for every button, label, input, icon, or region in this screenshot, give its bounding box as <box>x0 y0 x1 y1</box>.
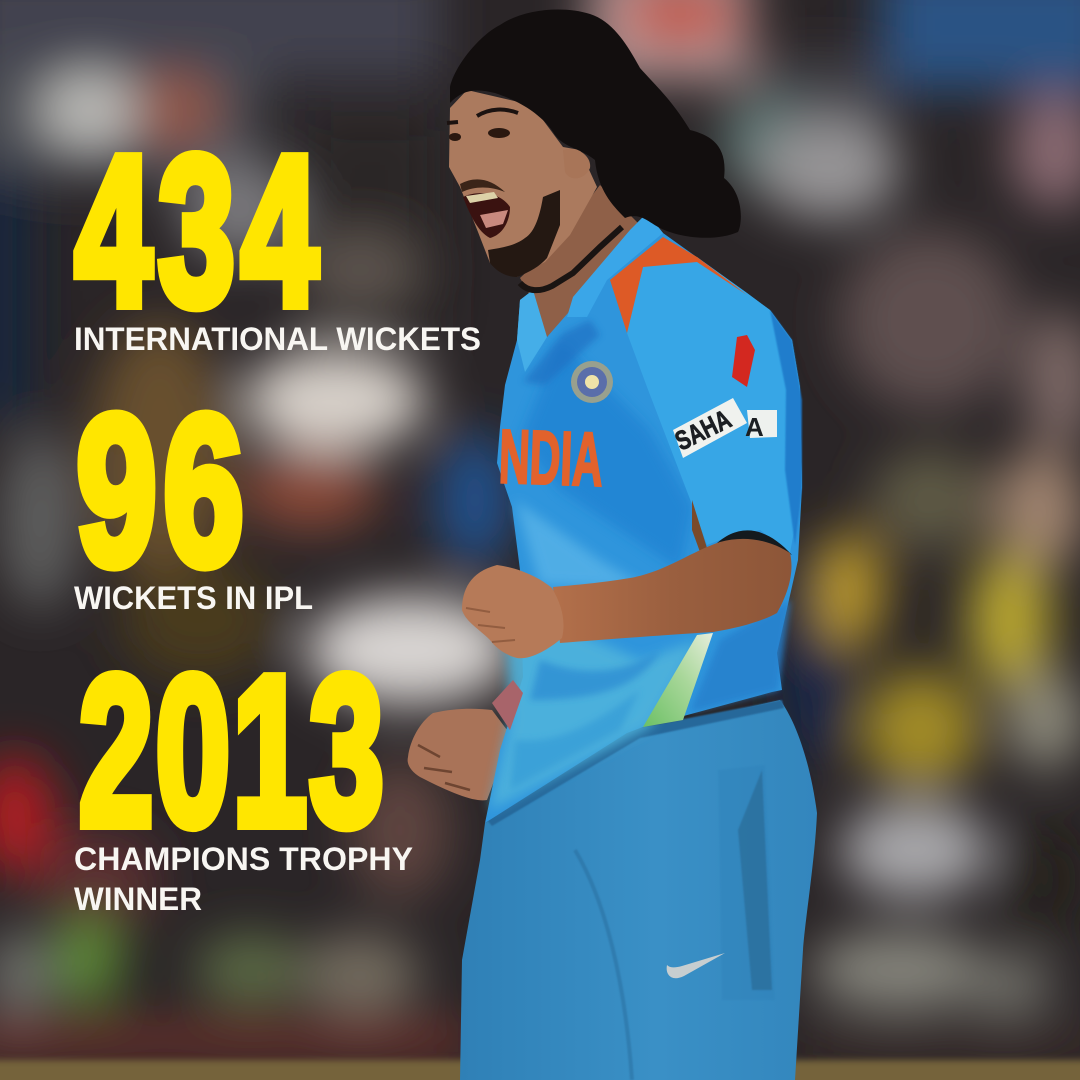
player: Ishant Sharma celebrating <box>408 9 817 1080</box>
forearm <box>553 539 791 643</box>
sponsor sleeve patch: SAHA <box>670 404 736 456</box>
sleeve cuff shadow <box>715 530 792 555</box>
clenched fist <box>462 565 564 658</box>
trousers waist shadow and side mesh <box>487 700 784 1080</box>
poppy patch <box>732 335 755 387</box>
collar <box>567 213 663 317</box>
sleeve side shadow <box>770 310 802 545</box>
necklace <box>520 227 622 290</box>
jersey shading folds <box>490 340 790 810</box>
face and jaw <box>449 90 597 277</box>
beard <box>488 190 560 277</box>
label: CHAMPIONS TROPHY <box>74 841 413 877</box>
number 2013: 2013 <box>79 633 386 869</box>
armpit shadow <box>692 500 707 552</box>
number 434: 434 <box>75 112 324 349</box>
chest badge <box>571 361 613 403</box>
stat: 434 international wickets <box>74 112 481 357</box>
wrist band <box>492 680 523 730</box>
moustache <box>460 179 505 192</box>
left collar <box>517 290 547 372</box>
orange raglan trim <box>610 237 747 333</box>
ear <box>563 149 590 178</box>
shirt placket <box>523 320 600 385</box>
stat: 96 wickets in IPL <box>74 373 313 616</box>
eyes and brows <box>447 110 518 141</box>
stat: 2013 Champions Trophy winner <box>74 633 413 917</box>
label: WICKETS IN IPL <box>74 580 313 616</box>
number 96: 96 <box>76 373 250 609</box>
jersey <box>485 213 802 823</box>
neck <box>520 185 640 337</box>
jersey lettering: NDIA <box>498 414 605 503</box>
open mouth <box>463 192 510 238</box>
white and green side panel <box>643 633 713 727</box>
label <box>74 841 413 917</box>
trousers <box>460 700 817 1080</box>
sleeve <box>627 257 802 553</box>
label: WINNER <box>74 881 202 917</box>
rear hand <box>408 709 507 800</box>
sponsor sleeve patch: A <box>745 412 764 442</box>
icon: Nike swoosh <box>667 953 725 978</box>
label: INTERNATIONAL WICKETS <box>74 321 481 357</box>
hair <box>450 9 741 238</box>
